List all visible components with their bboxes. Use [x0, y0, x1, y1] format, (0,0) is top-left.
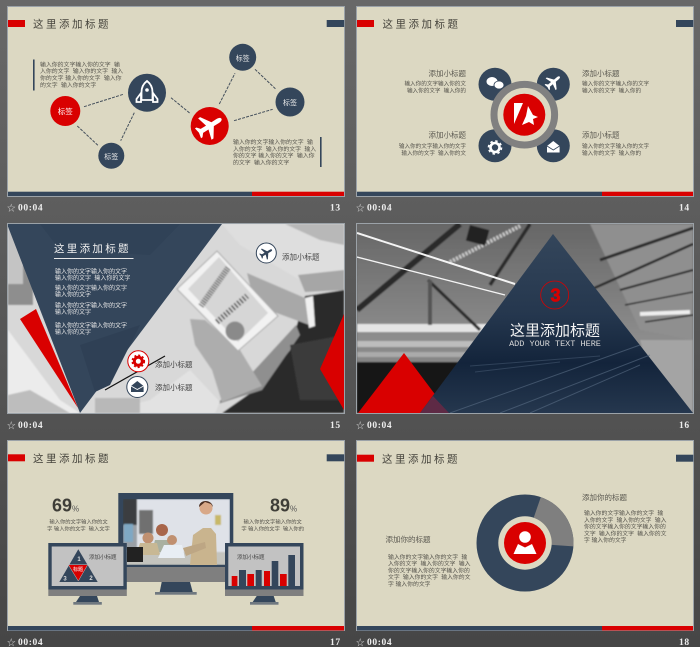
- text: left block: 字 输入你的文字: [388, 580, 431, 588]
- icon: chat: [478, 68, 512, 101]
- stat: 89%: [241, 496, 304, 532]
- footer: slide 15: [7, 420, 341, 431]
- footer: slide 13: 00:04: [18, 204, 43, 214]
- photo: bridge light trails: [357, 224, 693, 413]
- label: 添加小标题: [237, 553, 265, 561]
- dashed connectors: [77, 69, 276, 146]
- text block: left: 你的文字 输入你的文字 输入你: [40, 74, 122, 82]
- red triangle: [358, 353, 434, 413]
- text: right block: 添加你的标题: [582, 492, 627, 502]
- label: gear: 添加小标题: [155, 359, 193, 369]
- text block: navy panel: 输入你的文字输入你的文字: [55, 302, 127, 310]
- text: left block: 入你的文字 输入你的文字 输入: [388, 560, 471, 568]
- node: red label: 标签: [58, 106, 73, 116]
- footer: slide 13: ☆: [7, 203, 16, 213]
- text: right block: 你的文字输入你的文字输入你的: [584, 523, 666, 531]
- stat: 69%: 69%: [52, 496, 79, 516]
- panel: slide 16 section cover: [356, 224, 694, 414]
- node: right label: 标签: [283, 98, 297, 107]
- triangle diagram: 2: [89, 576, 93, 582]
- heading: slide 14 title: 这里添加标题: [382, 18, 460, 30]
- text: upper right: 输入你的文字 输入你的: [582, 86, 641, 94]
- panel: slide 14 hub diagram: [356, 6, 694, 196]
- text: right block: 输入你的文字输入你的文字 输: [584, 509, 663, 517]
- bar chart: [232, 555, 295, 586]
- text: lower right: 添加小标题: [582, 130, 620, 140]
- subtitle: ADD YOUR TEXT HERE: [509, 339, 601, 349]
- text: left block: 输入你的文字输入你的文字 输: [388, 553, 467, 561]
- text: upper right: [582, 68, 650, 94]
- footer: slide 18: [356, 638, 690, 647]
- text block: right: 输入你的文字输入你的文字 输: [233, 138, 313, 146]
- icon: mail badge: [127, 376, 148, 398]
- donut chart: [476, 494, 574, 592]
- text: upper left: 添加小标题: [428, 68, 466, 78]
- node: top label: 标签: [236, 54, 250, 62]
- text block: navy panel: 输入你的文字: [55, 290, 91, 298]
- text block: left: 的文字 输入你的文字: [40, 81, 96, 89]
- panel: slide 17 monitors: [8, 440, 344, 630]
- text: lower right: [582, 130, 650, 157]
- stat: 89%: 字 输入你的文字 输入你的: [241, 524, 304, 532]
- label: plane: 添加小标题: [282, 252, 320, 262]
- footer: slide 15: ☆: [7, 420, 16, 430]
- heading: slide 13 title: 这里添加标题: [33, 18, 111, 30]
- stat: 69%: 输入你的文字输入你的文: [49, 518, 108, 526]
- node: bottom label: [98, 143, 124, 169]
- text block: navy panel: 输入你的文字输入你的文字: [55, 322, 127, 330]
- monitor: left with triangle diagram: [48, 543, 127, 605]
- text: lower left: 输入你的文字输入你的文字: [399, 142, 466, 150]
- footer: slide 16: 00:04: [367, 421, 392, 431]
- text: lower left: [399, 130, 466, 157]
- text block: navy panel: [55, 268, 130, 336]
- hub ring and logo: [494, 84, 555, 145]
- panel: slide 18 donut: [356, 440, 694, 630]
- text block: right: 你的文字 输入你的文字 输入你: [233, 152, 315, 160]
- text: lower left: 添加小标题: [428, 130, 466, 140]
- icon: mail: [537, 129, 570, 162]
- footer: slide 13: 13: [330, 204, 341, 214]
- footer: slide 15: 15: [330, 421, 341, 431]
- icon: rocket: [128, 74, 166, 112]
- red left wedge: [20, 309, 78, 408]
- text block: navy panel: 输入你的文字输入你的文字: [55, 284, 127, 292]
- monitor: right with bar chart: [225, 543, 304, 605]
- text: upper right: 输入你的文字输入你的文字: [582, 79, 650, 87]
- text block: navy panel: 输入你的文字: [55, 328, 91, 336]
- text: right block: 字 输入你的文字: [584, 536, 627, 544]
- heading: slide 15 title: 这里添加标题: [54, 242, 131, 255]
- text block: right: 入你的文字 输入你的文字 输入: [233, 145, 316, 153]
- triangle diagram: [59, 549, 98, 582]
- heading: section title: 这里添加标题: [510, 322, 600, 340]
- text: left block: 文字 输入你的文字 输入你的文: [388, 573, 471, 581]
- text: upper left: 输入你的文字输入你的文: [404, 79, 466, 87]
- icon: gear: [478, 129, 512, 162]
- footer: slide 16: ☆: [356, 420, 365, 430]
- text: lower right: 输入你的文字输入你的文字: [582, 142, 650, 150]
- text block: right: 的文字 输入你的文字: [233, 158, 289, 166]
- monitor: center with photo: [118, 493, 233, 595]
- node: top label: [229, 44, 256, 71]
- text: lower right: 输入你的文字 输入你的: [582, 149, 641, 157]
- icon: gear badge: [128, 351, 149, 372]
- triangle diagram: 标题: [73, 566, 83, 573]
- text block: left: [33, 60, 123, 90]
- stat: 89%: 89%: [270, 496, 297, 516]
- panel: slide 15 photo with triangles: [7, 224, 344, 414]
- stat: 89%: 输入你的文字输入你的文: [244, 518, 303, 526]
- text: upper right: 添加小标题: [582, 68, 620, 78]
- triangle diagram: 1: [77, 557, 81, 563]
- footer: slide 16: [356, 420, 690, 431]
- text block: navy panel: 输入你的文字: [55, 308, 91, 316]
- footer: slide 15: 00:04: [18, 421, 43, 431]
- footer: slide 16: 16: [679, 421, 690, 431]
- navy triangle: [420, 234, 693, 413]
- number badge: 3: [550, 286, 561, 306]
- red right wedge: [320, 314, 344, 410]
- photo: team: [123, 499, 230, 565]
- heading: slide 18 title: 这里添加标题: [382, 452, 460, 466]
- text block: navy panel: 输入你的文字输入你的文字: [55, 268, 127, 276]
- icon: plane small: [537, 68, 570, 101]
- heading: slide 17 title: 这里添加标题: [33, 452, 111, 465]
- navy triangle: [7, 224, 222, 413]
- node: bottom label: 标签: [104, 152, 118, 161]
- stat: 69%: [47, 496, 110, 532]
- footer: slide 14: ☆: [356, 203, 365, 213]
- icon: person: [514, 531, 536, 554]
- label: mail: 添加小标题: [155, 382, 193, 392]
- text: right block: [582, 492, 667, 544]
- label: 添加小标题: [89, 553, 117, 561]
- panel: slide 13 network diagram: [8, 6, 344, 196]
- text: right block: 入你的文字 输入你的文字 输入: [584, 516, 667, 524]
- stat: 69%: 字 输入你的文字 输入文字: [47, 524, 110, 532]
- text: left block: 添加你的标题: [386, 534, 431, 544]
- text block: navy panel: 输入你的文字 输入你的文字: [55, 274, 130, 282]
- text: right block: 文字 输入你的文字 输入你的文: [584, 530, 667, 538]
- footer: slide 14: 00:04: [367, 204, 392, 214]
- text block: right: [233, 137, 322, 167]
- footer: slide 17: [7, 638, 341, 647]
- text: left block: 你的文字输入你的文字输入你的: [388, 566, 470, 574]
- node: red label: [50, 96, 80, 126]
- photo: papers and hands: [8, 224, 344, 413]
- icon: plane: [191, 107, 229, 145]
- footer: slide 14: [356, 203, 690, 214]
- text block: left: 入你的文字 输入你的文字 输入: [40, 67, 123, 75]
- text: upper left: [404, 68, 466, 94]
- footer: slide 13: [7, 203, 341, 214]
- triangle diagram: 3: [63, 576, 67, 582]
- icon: plane badge: [256, 243, 276, 263]
- footer: slide 14: 14: [679, 204, 690, 214]
- node: right label: [276, 88, 304, 116]
- number badge: [541, 281, 569, 309]
- text: lower left: 输入你的文字 输入你的文: [401, 149, 466, 157]
- text: upper left: 输入你的文字 输入你的: [407, 86, 466, 94]
- text: left block: [386, 534, 471, 588]
- text block: left: 输入你的文字输入你的文字 输: [40, 60, 120, 68]
